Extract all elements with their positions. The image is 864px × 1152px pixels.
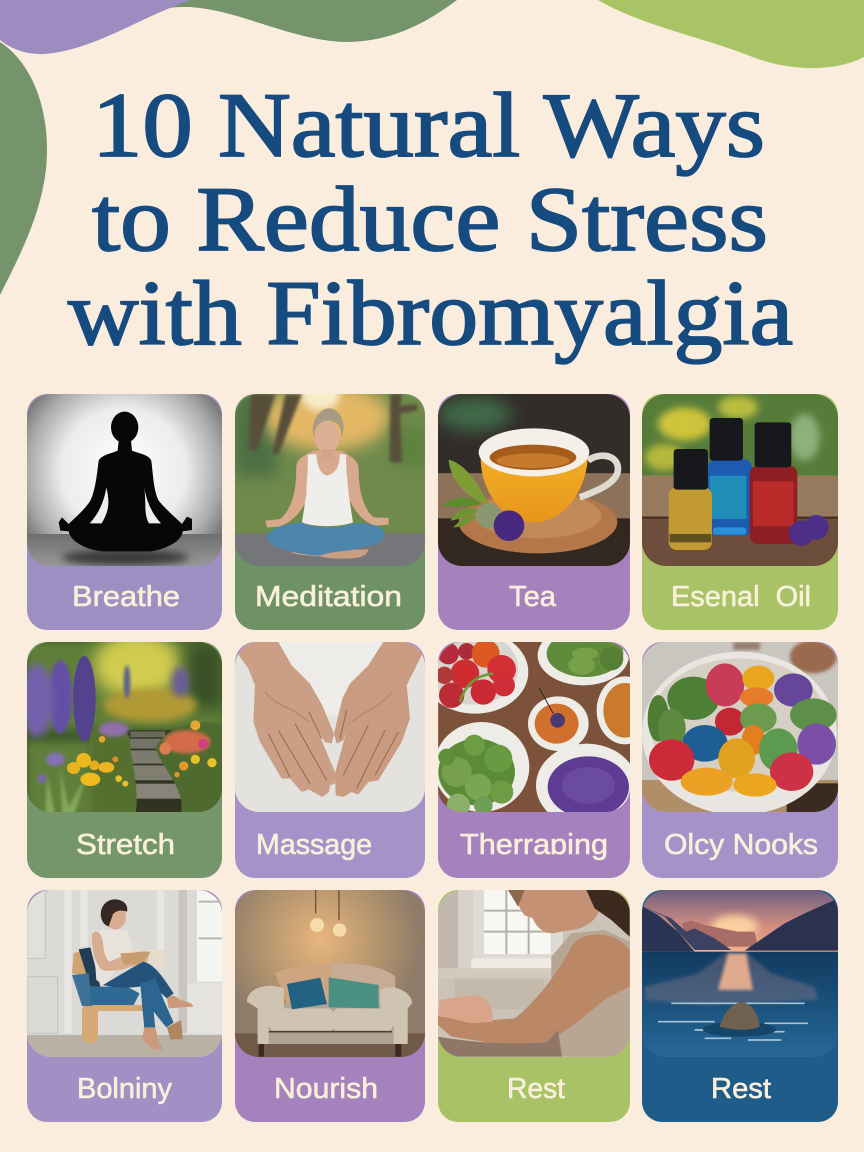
label: Bolniny [77, 1073, 172, 1105]
icon: hands on white surface [235, 642, 427, 814]
panel: massage [235, 642, 427, 878]
icon: woman sitting in chair [27, 890, 224, 1062]
panel: meditation [234, 377, 430, 630]
title [68, 74, 793, 364]
title: 10 Natural Ways [92, 74, 765, 176]
panel: breathe [27, 394, 224, 630]
icon: flower garden path [27, 642, 222, 812]
label: Olcy Nooks [664, 829, 818, 861]
title: with Fibromyalgia [68, 262, 793, 364]
icon: lake at sunset with stone [642, 890, 839, 1063]
label: Tea [509, 581, 557, 613]
icon: meditating silhouette [27, 394, 224, 567]
label: Rest [507, 1073, 565, 1105]
panel: nourish [235, 890, 426, 1122]
label: Rest [711, 1073, 771, 1105]
icon: essential oil bottles [642, 394, 839, 567]
label: Breathe [72, 581, 180, 613]
icon: resting woman at window [438, 890, 630, 1060]
icon: bowls of herbs [438, 642, 630, 812]
decorative top-right lime wave [598, 0, 864, 68]
panel: stretch [21, 632, 224, 878]
icon: sofa with lamps [235, 890, 426, 1060]
label: Meditation [255, 581, 402, 613]
label: Esenal Oil [671, 581, 811, 613]
panel: therapeutic herbs [438, 642, 630, 878]
panel: colourful food [640, 640, 840, 878]
panel: rest woman [438, 890, 630, 1122]
label: Stretch [76, 829, 175, 861]
label: Therraɒing [460, 829, 608, 861]
decorative top-left lavender wave [0, 0, 200, 54]
panel: woman in chair [27, 890, 224, 1122]
decorative left green wave [0, 42, 47, 295]
label: Massage [256, 829, 372, 861]
label: Nourish [274, 1073, 378, 1105]
panel: tea [438, 394, 631, 630]
panel: essential oil [642, 394, 839, 630]
panel: rest lake [642, 890, 839, 1122]
icon: woman meditating in garden [235, 394, 425, 566]
title: to Reduce Stress [92, 168, 768, 270]
icon: cup of tea [438, 394, 631, 567]
icon: bowl of colourful fruit [640, 640, 840, 815]
decorative top-centre green wave [170, 0, 457, 42]
